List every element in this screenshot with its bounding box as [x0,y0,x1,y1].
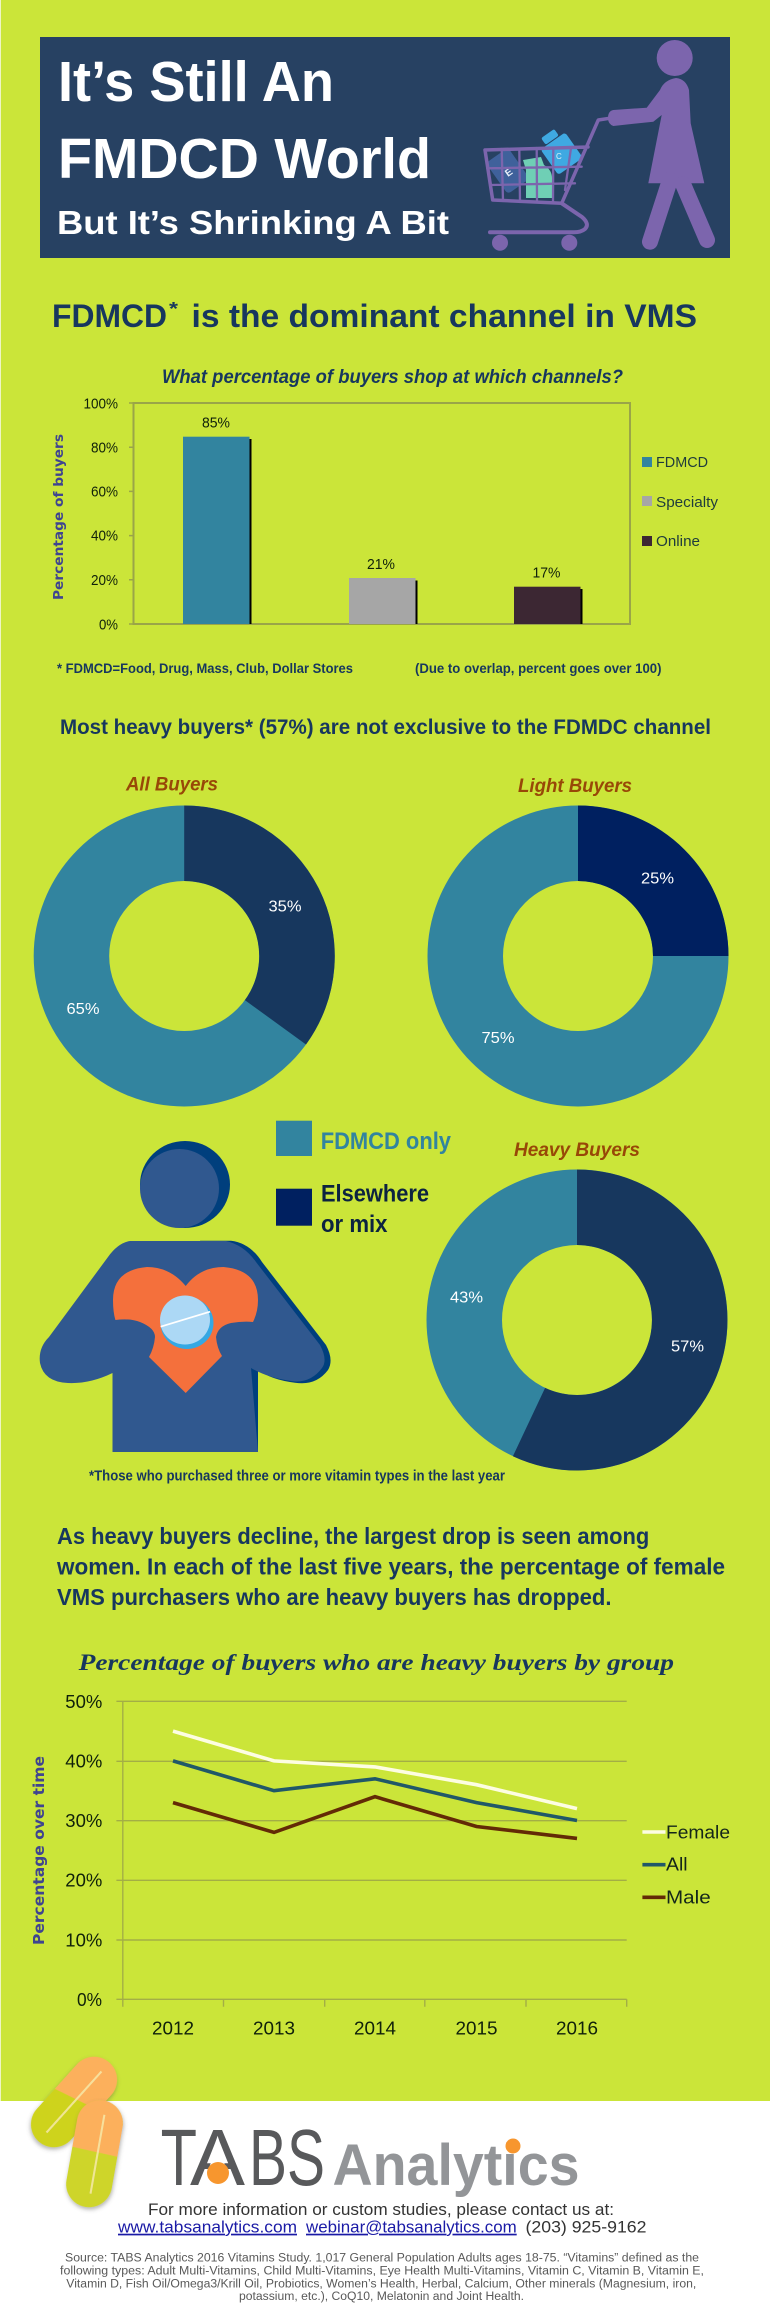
donut chart: heavy buyers [450,1140,727,1470]
line: all [173,1761,577,1820]
bar: FDMCD 85% [183,415,252,624]
logo: T [161,2113,197,2202]
donut chart: light buyers: 25% [641,871,674,888]
icon: woman pushing cart [608,40,707,242]
source note [60,2253,704,2303]
logo [161,2113,580,2202]
bar: Online 17% [514,565,582,624]
icon: shopping cart with vitamin bottles [485,118,609,251]
line chart legend: Female [666,1822,730,1842]
heading: dominant channel: * [169,299,178,319]
y axis labels: 0% [77,1990,102,2010]
footer panel [0,2047,770,2310]
heart [113,1267,258,1393]
paragraph: heavy buyers decline: women. In each of the last five years, the percentage of female [56,1554,725,1580]
y axis title: Percentage over time [30,1756,48,1945]
bar: FDMCD 85%: 85% [202,415,230,432]
donut chart: all buyers: 65% [66,1001,100,1018]
donut legend: or mix [321,1211,388,1238]
source note: Vitamin D, Fish Oil/Omega3/Krill Oil, Probiotics, Women’s Health, Herbal, Calcium, Other minerals (Magnesium, iron, [66,2278,696,2290]
donut chart: light buyers: Light Buyers [518,776,632,797]
contact text: www.tabsanalytics.com [117,2218,297,2237]
paragraph: heavy buyers decline: VMS purchasers who are heavy buyers has dropped. [57,1584,612,1610]
title: It’s Still An [58,50,334,114]
x axis labels: 2015 [456,2019,498,2039]
title [57,50,449,241]
footnotes under bar chart: * FDMCD=Food, Drug, Mass, Club, Dollar Stores [57,660,353,676]
icon: shopping cart with vitamin bottles: E [503,166,515,179]
y axis labels [65,1692,102,2010]
chart legend: Online [656,533,700,550]
heading: dominant channel: FDMCD [52,298,167,334]
y axis labels: 100% [84,396,118,412]
icon: shopping cart with vitamin bottles: C [556,152,562,161]
line chart legend [642,1822,730,1908]
donut legend: Elsewhere [321,1181,429,1208]
bar: Specialty 21% [349,556,418,624]
chart title: What percentage of buyers shop at which channels? [162,367,623,388]
donut chart: all buyers: 35% [268,899,302,916]
footnotes under bar chart: (Due to overlap, percent goes over 100) [415,660,662,676]
x axis labels: 2013 [253,2019,295,2039]
donut legend: FDMCD only [321,1128,452,1155]
donut chart: all buyers [66,775,335,1069]
donut chart: light buyers [465,776,728,1069]
y axis labels: 0% [99,616,118,634]
logo: A [190,2113,246,2202]
x axis labels: 2012 [152,2019,194,2039]
source note: following types: Adult Multi-Vitamins, Child Multi-Vitamins, Eye Health Multi-Vitamins, Vitamin C, Vitamin B, Vitamin E, [60,2266,704,2278]
chart legend: FDMCD [656,454,708,471]
icon: capsule front [62,2097,127,2211]
icon: capsule back [21,2047,127,2157]
donut chart: all buyers: All Buyers [125,775,218,796]
line chart legend: Male [666,1888,711,1908]
heading: dominant channel: is the dominant channel in VMS [192,298,697,334]
chart legend: Specialty [656,494,718,511]
header banner [40,37,730,258]
source note: Source: TABS Analytics 2016 Vitamins Study. 1,017 General Population Adults ages 18-75. “Vitamins” defined as the [65,2253,699,2265]
logo: Analytics [332,2133,580,2198]
title: FMDCD World [58,127,431,191]
y axis title: Percentage of buyers [51,434,67,600]
paragraph: heavy buyers decline: As heavy buyers decline, the largest drop is seen among [57,1523,649,1549]
logo: BS [249,2113,325,2202]
footnote: heavy buyer definition: *Those who purchased three or more vitamin types in the last year [89,1469,505,1485]
bar: Online 17%: 17% [532,565,560,582]
chart legend [642,454,718,550]
line chart legend: All [666,1855,688,1875]
icon: person holding vitamin to heart [40,1141,331,1452]
y axis labels: 80% [91,440,118,456]
donut chart: heavy buyers: 43% [450,1290,483,1307]
x axis labels [152,2019,598,2039]
source note: potassium, etc.), CoQ10, Melatonin and Joint Health. [239,2291,524,2303]
y axis labels: 20% [91,572,118,589]
contact text: (203) 925-9162 [526,2218,646,2237]
y axis labels: 40% [65,1752,102,1772]
contact text [117,2200,646,2237]
bar: Specialty 21%: 21% [367,556,395,573]
y axis labels: 30% [65,1811,102,1831]
paragraph: heavy buyers decline [56,1523,725,1610]
chart title: Percentage of buyers who are heavy buyers by group [77,1650,674,1675]
bar chart: buyers by channel [51,367,718,634]
donut chart: heavy buyers: 57% [671,1339,704,1356]
donut legend [276,1121,452,1238]
y axis labels [84,396,118,634]
vitamin pill [160,1296,214,1349]
x axis labels: 2016 [556,2019,598,2039]
y axis labels: 20% [65,1870,102,1890]
title: But It’s Shrinking A Bit [57,204,449,241]
heading: heavy buyers: Most heavy buyers* (57%) are not exclusive to the FDMDC channel [60,716,711,739]
line: male [173,1797,577,1838]
footnotes under bar chart [57,660,662,676]
line: female [173,1731,577,1809]
y axis labels: 60% [91,484,118,500]
x axis labels: 2014 [354,2019,396,2039]
y axis labels: 10% [65,1930,102,1950]
line chart: heavy buyers by group [30,1650,730,2039]
y axis labels: 40% [91,528,118,544]
y axis labels: 50% [65,1692,102,1712]
donut chart: heavy buyers: Heavy Buyers [514,1140,640,1161]
donut chart: light buyers: 75% [482,1030,514,1047]
contact text: For more information or custom studies, please contact us at: [148,2200,614,2219]
contact text: webinar@tabsanalytics.com [305,2218,517,2237]
